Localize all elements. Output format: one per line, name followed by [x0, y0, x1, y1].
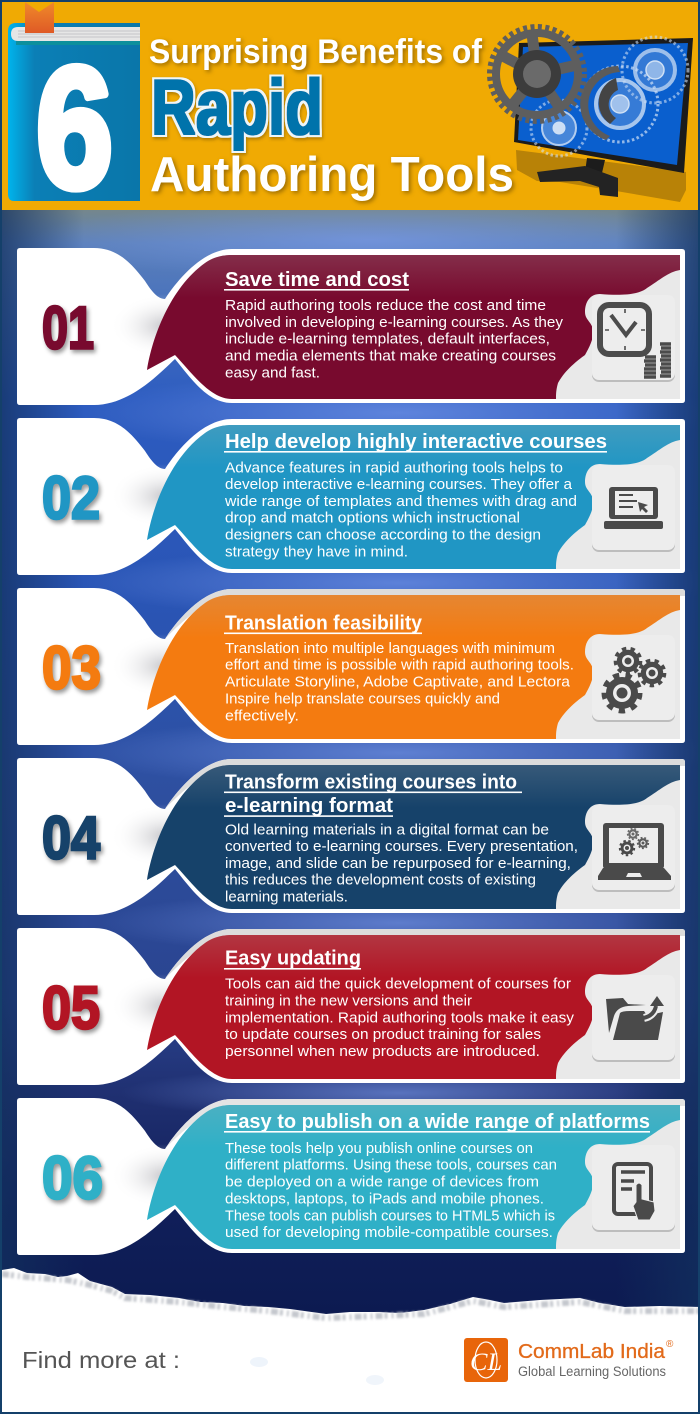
header banner — [0, 0, 700, 224]
body text — [225, 1141, 557, 1241]
body text: training in the new versions and their — [225, 993, 472, 1009]
logo: CommLab India: CommLab India — [518, 1341, 666, 1363]
logo: CommLab India: CL — [470, 1349, 502, 1376]
logo: CommLab India: ® — [666, 1339, 674, 1350]
body text: These tools can publish courses to HTML5 which is — [225, 1208, 555, 1224]
body text — [225, 641, 574, 724]
body text: desktops, laptops, to iPads and mobile phones. — [225, 1191, 544, 1207]
body text: Tools can aid the quick development of courses for — [225, 977, 571, 993]
icon: folder with arrow — [592, 975, 675, 1062]
body text: be deployed on a wide range of devices from — [225, 1175, 539, 1191]
number 01: 01 — [42, 294, 94, 362]
logo: CommLab India — [464, 1338, 674, 1382]
body text: Inspire help translate courses quickly and — [225, 692, 500, 708]
card 03: translation feasibility — [17, 588, 685, 745]
body text: to update courses on product training for sales — [225, 1027, 541, 1043]
body text: develop interactive e-learning courses. They offer a — [225, 477, 573, 493]
body text: Advance features in rapid authoring tools helps to — [225, 460, 563, 476]
body text: different platforms. Using these tools, courses can — [225, 1158, 557, 1174]
card 06: publish on platforms — [17, 1098, 685, 1255]
number 05: 05 — [42, 974, 100, 1042]
icon: book with number 6: 6 — [36, 32, 113, 224]
logo: CommLab India: Global Learning Solutions — [518, 1364, 666, 1379]
heading: Save time and cost — [225, 269, 409, 291]
body text: effort and time is possible with rapid authoring tools. — [225, 658, 574, 674]
body text: and media elements that make creating courses — [225, 348, 556, 364]
heading: Help develop highly interactive courses — [225, 431, 607, 453]
card 02: interactive courses — [17, 418, 685, 575]
body text: easy and fast. — [225, 365, 320, 381]
body text: implementation. Rapid authoring tools make it easy — [225, 1010, 575, 1026]
number 03: 03 — [42, 634, 101, 702]
heading: e-learning format — [225, 795, 393, 817]
card 05: easy updating — [17, 928, 685, 1085]
icon: tablet with pointing hand — [592, 1145, 675, 1232]
body text: These tools help you publish online courses on — [225, 1141, 533, 1157]
find more label: Find more at : — [22, 1347, 180, 1373]
card 01: save time and cost — [17, 248, 685, 405]
body text: Rapid authoring tools reduce the cost and time — [225, 298, 546, 314]
body text: designers can choose according to the design — [225, 528, 541, 544]
heading: Translation feasibility — [225, 612, 423, 634]
body text: wide range of templates and themes with drag and — [224, 494, 577, 510]
body text — [225, 822, 578, 906]
body text — [225, 298, 564, 381]
body text: image, and slide can be repurposed for e-learning, — [225, 856, 571, 872]
body text: this reduces the development costs of existing — [225, 873, 536, 889]
number 04: 04 — [42, 804, 101, 872]
body text — [225, 977, 575, 1060]
body text: personnel when new products are introduced. — [225, 1044, 540, 1060]
torn snow footer — [0, 1268, 700, 1414]
number 06: 06 — [42, 1144, 103, 1212]
body text: strategy they have in mind. — [225, 544, 408, 560]
body text: Translation into multiple languages with minimum — [225, 641, 555, 657]
illustration: monitor with gears — [490, 27, 693, 202]
body text: effectively. — [225, 708, 299, 724]
icon: three gears — [592, 635, 675, 722]
body text: learning materials. — [225, 890, 348, 906]
icon: laptop with gears — [592, 805, 675, 892]
body text: include e-learning templates, default interfaces, — [225, 332, 550, 348]
heading: Easy to publish on a wide range of platforms — [225, 1111, 650, 1133]
icon: clock and coins — [592, 295, 675, 382]
icon: book with number 6 — [8, 2, 140, 224]
heading — [224, 771, 522, 817]
number 02: 02 — [42, 464, 100, 532]
icon: laptop with cursor — [592, 465, 675, 552]
body text: converted to e-learning courses. Every presentation, — [225, 839, 578, 855]
heading: Transform existing courses into — [225, 771, 517, 793]
body text: drop and match options which instructional — [225, 511, 520, 527]
body text: used for developing mobile-compatible courses. — [225, 1225, 553, 1241]
body text: Old learning materials in a digital format can be — [225, 822, 549, 838]
heading: Easy updating — [225, 948, 361, 970]
card 04: transform existing courses — [17, 758, 685, 915]
body text — [224, 460, 577, 560]
title line 1: Surprising Benefits of — [149, 33, 483, 71]
body text: Articulate Storyline, Adobe Captivate, and Lectora — [225, 675, 571, 691]
title line 2: Rapid — [151, 63, 323, 151]
title line 3: Authoring Tools — [150, 148, 514, 202]
body text: involved in developing e-learning courses. As they — [225, 315, 564, 331]
